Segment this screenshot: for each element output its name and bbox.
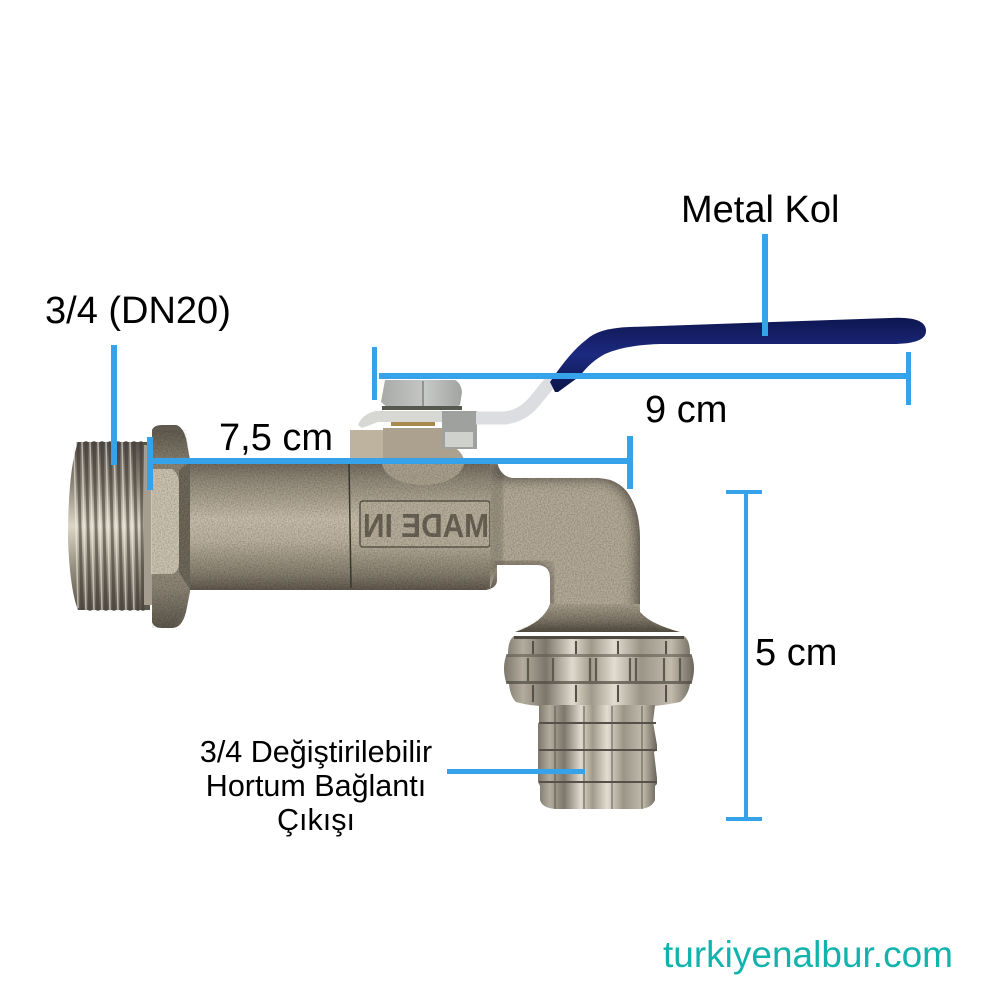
hose outlet leader [447, 769, 585, 774]
hose barb [538, 705, 657, 809]
website: turkiyenalbur.com [663, 934, 953, 975]
label: 3/4 (DN20): 3/4 (DN20) [45, 290, 231, 332]
label: hose outlet [200, 735, 432, 837]
label: hose outlet: Hortum Bağlantı [206, 769, 426, 803]
stem nut and lever plate [358, 380, 477, 449]
elbow [490, 460, 685, 635]
label: hose outlet: 3/4 Değiştirilebilir [200, 735, 432, 769]
label: 5 cm: 5 cm [755, 632, 837, 674]
embossed MADE IN: MADE IN [363, 507, 489, 544]
grain texture on cast parts [152, 430, 660, 630]
label: hose outlet: Çıkışı [277, 803, 355, 837]
metal lever leader [762, 234, 768, 336]
dimension: 7,5 cm [147, 436, 633, 490]
dimension: 9 cm [372, 347, 911, 405]
label: 7,5 cm: 7,5 cm [219, 417, 333, 459]
hex collar [151, 425, 190, 628]
faucet photo [68, 318, 926, 809]
hose nut [504, 636, 694, 706]
label: 9 cm: 9 cm [645, 389, 727, 431]
main body [186, 461, 497, 590]
dimension: 3/4 thread leader [111, 345, 117, 465]
casting seam [349, 462, 351, 588]
label: Metal Kol: Metal Kol [681, 189, 839, 231]
blue lever handle [550, 318, 926, 392]
bonnet under stem [350, 420, 464, 485]
dimension: 5 cm [726, 490, 762, 821]
male thread end [68, 441, 153, 611]
metal lever neck [476, 380, 552, 418]
